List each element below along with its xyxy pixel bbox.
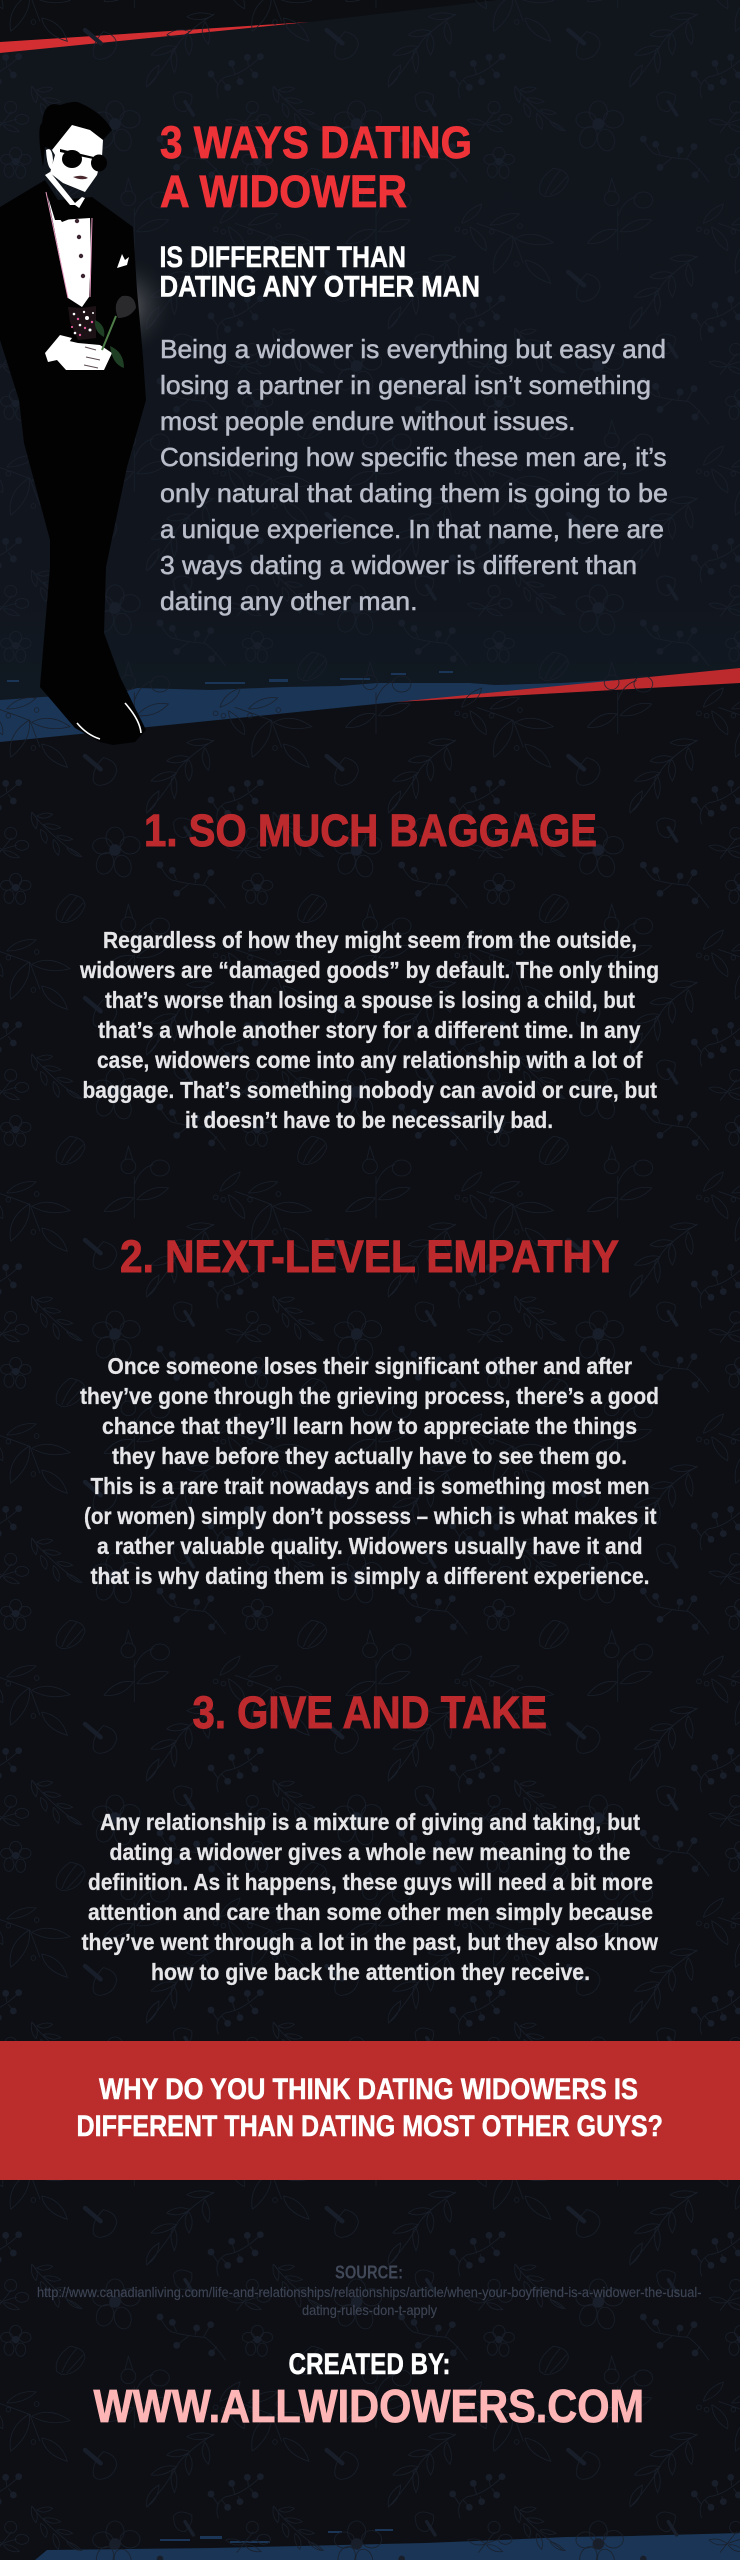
illustration: man in tuxedo with rose (0, 102, 174, 745)
title: A WIDOWER (160, 166, 407, 217)
section 3 text: how to give back the attention they receive. (151, 1959, 590, 1985)
title: 3 WAYS DATING (160, 117, 472, 168)
ear (46, 149, 53, 170)
section 2 text: (or women) simply don’t possess – which is what makes it (84, 1503, 657, 1529)
shirt front (48, 197, 91, 307)
rose (95, 296, 136, 368)
section 2 text (80, 1353, 659, 1589)
source credit: SOURCE: (335, 2262, 403, 2282)
source credit (37, 2262, 702, 2318)
section 1 text: widowers are “damaged goods” by default. The only thing (79, 957, 659, 983)
subtitle: DATING ANY OTHER MAN (160, 270, 480, 304)
section 3 text (82, 1809, 658, 1985)
section 3 heading: 3. GIVE AND TAKE (192, 1687, 547, 1738)
finger lines (84, 347, 100, 368)
top dark wedge (0, 0, 497, 53)
bottom blue brush band (35, 2529, 740, 2560)
section 1 text: that’s worse than losing a spouse is losing a child, but (105, 987, 635, 1013)
call to action banner: WHY DO YOU THINK DATING WIDOWERS IS (99, 2073, 638, 2106)
shirt lapel lines (46, 192, 92, 298)
intro paragraph (160, 334, 668, 616)
created by: CREATED BY: (288, 2348, 450, 2381)
section 1 text: case, widowers come into any relationship with a lot of (97, 1047, 643, 1073)
bow tie (53, 198, 93, 222)
section 3 text: they’ve went through a lot in the past, but they also know (82, 1929, 658, 1955)
intro paragraph: only natural that dating them is going to be (160, 478, 668, 508)
rose glow (74, 256, 174, 356)
section 1 heading: 1. SO MUCH BAGGAGE (144, 805, 597, 856)
source credit: dating-rules-don-t-apply (302, 2302, 437, 2318)
intro paragraph: most people endure without issues. (160, 406, 576, 436)
lower red stripe (396, 668, 740, 702)
section 2 text: that is why dating them is simply a different experience. (90, 1563, 650, 1589)
shoe highlights (77, 703, 141, 739)
section 1 text: Regardless of how they might seem from the outside, (103, 927, 637, 953)
section 2 text: a rather valuable quality. Widowers usually have it and (97, 1533, 642, 1559)
section 2 text: they’ve gone through the grieving process, there’s a good (80, 1383, 659, 1409)
subtitle (160, 241, 480, 304)
blue brush band (0, 671, 613, 742)
sequin cummerbund (68, 306, 96, 340)
collar (45, 172, 85, 210)
section 1 text: baggage. That’s something nobody can avoid or cure, but (82, 1077, 657, 1103)
section 1 text: it doesn’t have to be necessarily bad. (185, 1107, 553, 1133)
shirt cuff and hand (45, 335, 112, 370)
header panel (0, 0, 740, 742)
subtitle: IS DIFFERENT THAN (160, 241, 406, 274)
intro paragraph: Being a widower is everything but easy and (160, 334, 666, 364)
section 2 text: Once someone loses their significant other and after (108, 1353, 632, 1379)
shirt studs (75, 219, 85, 278)
tuxedo silhouette (0, 180, 146, 745)
intro paragraph: a unique experience. In that name, here are (160, 514, 664, 544)
intro paragraph: dating any other man. (160, 586, 418, 616)
top red stripe (0, 22, 309, 53)
section 2 heading: 2. NEXT-LEVEL EMPATHY (120, 1231, 619, 1282)
face (50, 125, 103, 192)
section 1 text (79, 927, 659, 1133)
call to action banner (0, 2041, 740, 2180)
section 2 text: they have before they actually have to see them go. (112, 1443, 627, 1469)
sunglasses (60, 149, 107, 172)
pocket square (117, 254, 129, 268)
section 3 text: attention and care than some other men simply because (88, 1899, 653, 1925)
website: WWW.ALLWIDOWERS.COM (94, 2380, 644, 2432)
title (160, 117, 472, 217)
section 1 text: that’s a whole another story for a different time. In any (98, 1017, 641, 1043)
mouth (73, 176, 88, 179)
section 3 text: dating a widower gives a whole new meaning to the (110, 1839, 630, 1865)
intro paragraph: Considering how specific these men are, it’s (160, 442, 666, 472)
intro paragraph: 3 ways dating a widower is different than (160, 550, 637, 580)
section 2 text: chance that they’ll learn how to appreciate the things (102, 1413, 637, 1439)
section 3 text: Any relationship is a mixture of giving and taking, but (100, 1809, 640, 1835)
intro paragraph: losing a partner in general isn’t something (160, 370, 651, 400)
section 2 text: This is a rare trait nowadays and is something most men (90, 1473, 650, 1499)
section 3 text: definition. As it happens, these guys will need a bit more (88, 1869, 653, 1895)
hair (39, 102, 112, 167)
